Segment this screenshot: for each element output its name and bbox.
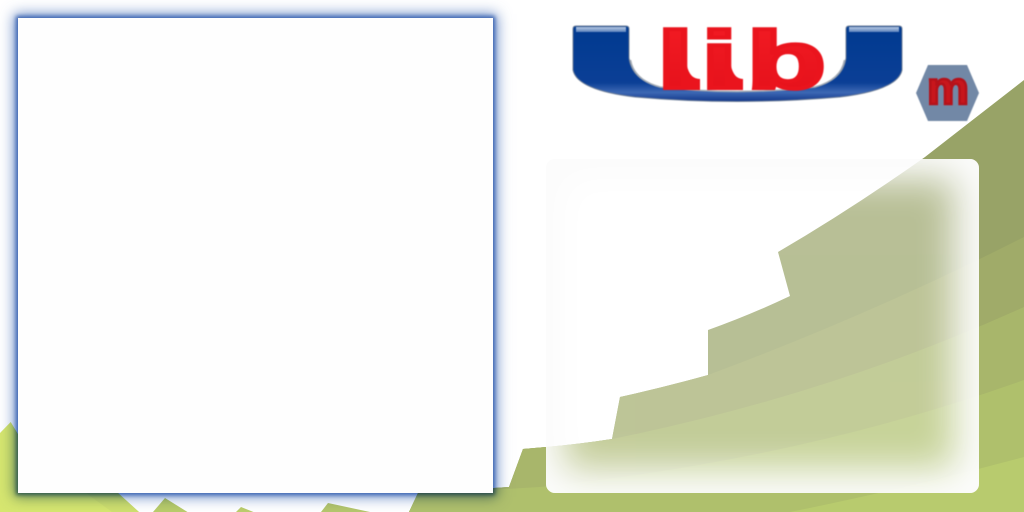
logo: lib xyxy=(573,15,902,105)
logo: m hexagon badge: m xyxy=(927,62,969,114)
logo: lib: lib xyxy=(657,15,826,105)
panel: left white card xyxy=(18,18,493,493)
left panel shadow xyxy=(18,18,493,493)
panel: right card base xyxy=(546,159,979,493)
left hill spikes xyxy=(0,422,370,512)
panel: right card feathered edge xyxy=(546,159,979,493)
logo: m hexagon badge xyxy=(916,62,979,121)
